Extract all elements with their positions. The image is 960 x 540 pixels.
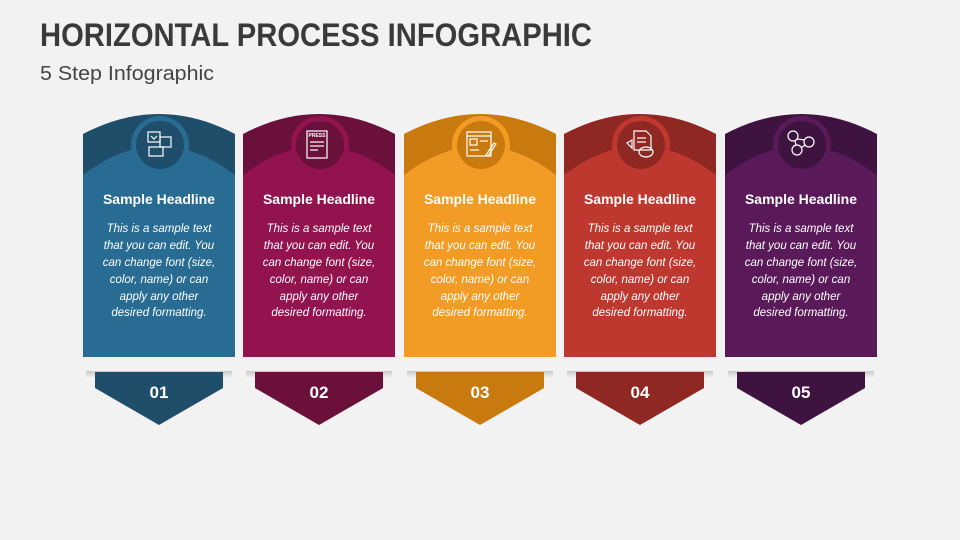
card 2: PRESS (309, 133, 326, 139)
subtitle: 5 Step Infographic (40, 63, 214, 85)
card 5: color, name) or can (752, 274, 850, 286)
card 2: that you can edit. You (264, 240, 375, 252)
card 1: This is a sample text (107, 223, 212, 235)
card 3: Sample Headline (424, 191, 536, 207)
card 4: apply any other (601, 291, 680, 303)
card 1: that you can edit. You (104, 240, 215, 252)
card 5: Sample Headline (745, 191, 857, 207)
card 3: color, name) or can (431, 274, 529, 286)
card 5 (725, 114, 877, 425)
card 2: This is a sample text (267, 223, 372, 235)
card 5: This is a sample text (749, 223, 854, 235)
card 2 (243, 114, 395, 425)
card 2: can change font (size, (263, 257, 375, 269)
card 5: desired formatting. (753, 307, 849, 319)
card 1: 01 (150, 383, 168, 402)
card 1: Sample Headline (103, 191, 215, 207)
card 3: This is a sample text (428, 223, 533, 235)
card 4: color, name) or can (591, 274, 689, 286)
card 2: Sample Headline (263, 191, 375, 207)
card 3: that you can edit. You (425, 240, 536, 252)
card 4: This is a sample text (588, 223, 693, 235)
card 5: 05 (792, 383, 810, 402)
card 3: desired formatting. (432, 307, 528, 319)
icon: bitcoin network (788, 131, 814, 155)
card 2: desired formatting. (271, 307, 367, 319)
icon: document chat (627, 131, 653, 157)
card 1: desired formatting. (111, 307, 207, 319)
card 5: apply any other (762, 291, 841, 303)
icon: social feedback (148, 132, 171, 156)
card 4: 04 (631, 383, 650, 402)
card 1: color, name) or can (110, 274, 208, 286)
card 3: 03 (471, 383, 489, 402)
card 3: apply any other (441, 291, 520, 303)
card 3: can change font (size, (424, 257, 536, 269)
title: HORIZONTAL PROCESS INFOGRAPHIC (40, 17, 592, 53)
card 4: can change font (size, (584, 257, 696, 269)
card 5: that you can edit. You (746, 240, 857, 252)
card 2: color, name) or can (270, 274, 368, 286)
card 4 (564, 114, 716, 425)
icon: press (307, 131, 327, 158)
card 4: desired formatting. (592, 307, 688, 319)
card 4: Sample Headline (584, 191, 696, 207)
card 3 (404, 114, 556, 425)
card 2: apply any other (280, 291, 359, 303)
card 5: can change font (size, (745, 257, 857, 269)
card 1: apply any other (120, 291, 199, 303)
card 1: can change font (size, (103, 257, 215, 269)
card 2: 02 (310, 383, 328, 402)
card 4: that you can edit. You (585, 240, 696, 252)
icon: web editing (467, 132, 496, 156)
card 1 (83, 114, 235, 425)
